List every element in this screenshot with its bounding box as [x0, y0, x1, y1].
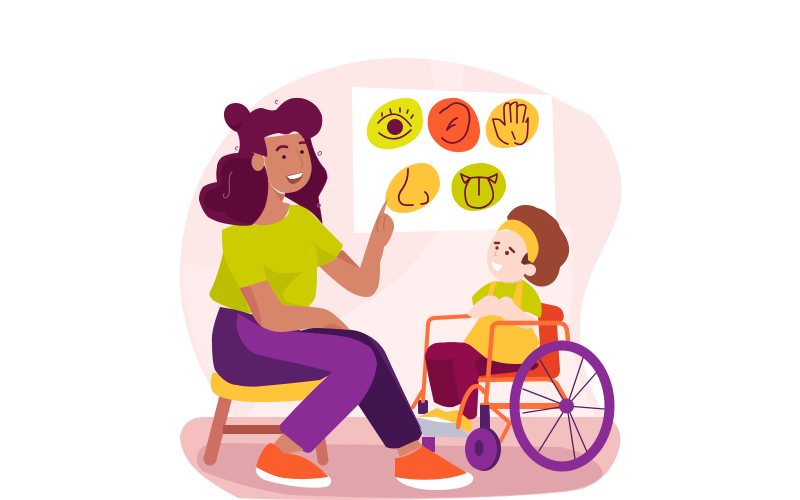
icon: hand [486, 99, 539, 148]
hips [212, 307, 335, 387]
far shoe [395, 446, 473, 490]
hand shade [322, 324, 343, 329]
resting arm [240, 280, 350, 332]
child [416, 205, 569, 438]
neck shade [267, 182, 285, 202]
right back hair [285, 138, 327, 223]
stool [210, 372, 325, 460]
pointing arm [318, 198, 394, 297]
far ankle [397, 440, 423, 457]
far leg [297, 327, 422, 448]
arms and hands [468, 296, 536, 329]
poster [352, 87, 556, 233]
icon: ear [428, 98, 480, 152]
ear [524, 264, 536, 276]
footrest [417, 418, 470, 438]
sideburn [521, 252, 530, 265]
apron [463, 281, 540, 364]
arm shade [335, 250, 360, 268]
legs [425, 342, 538, 419]
hair [507, 205, 569, 287]
face [264, 133, 312, 193]
left hair rim [199, 147, 268, 226]
fork [480, 405, 490, 432]
bun shade [228, 120, 243, 130]
near ankle [273, 433, 304, 455]
neck [500, 276, 522, 283]
mouth [286, 172, 303, 184]
small front wheel [465, 427, 501, 471]
wheelchair front frame [458, 323, 610, 471]
near shoe [256, 443, 331, 488]
far leg edge [367, 335, 422, 430]
torso shirt [210, 205, 343, 313]
icon: tongue [451, 163, 506, 211]
woman [199, 98, 473, 490]
floor [180, 417, 620, 500]
background blob [180, 58, 622, 425]
icon: nose [385, 163, 440, 213]
wheelchair [413, 302, 564, 452]
icon: eye [367, 98, 423, 149]
shoes [418, 408, 473, 432]
headband [497, 220, 539, 263]
smile and eyes [491, 243, 514, 271]
rear frame [413, 316, 470, 407]
neck and chest [235, 178, 290, 225]
large wheel [514, 346, 610, 466]
upper arm shade [240, 286, 262, 327]
finger creases [377, 216, 386, 232]
shirt shade [210, 237, 337, 313]
rear small wheel [418, 400, 435, 452]
ear [252, 153, 264, 171]
face [487, 230, 529, 282]
near leg [236, 313, 377, 453]
back cushion [476, 302, 564, 380]
left hair shade [204, 158, 267, 224]
shirt [472, 280, 542, 318]
top hair and bun [224, 98, 322, 157]
eyes and brows [277, 142, 307, 168]
hair curls [223, 100, 322, 207]
